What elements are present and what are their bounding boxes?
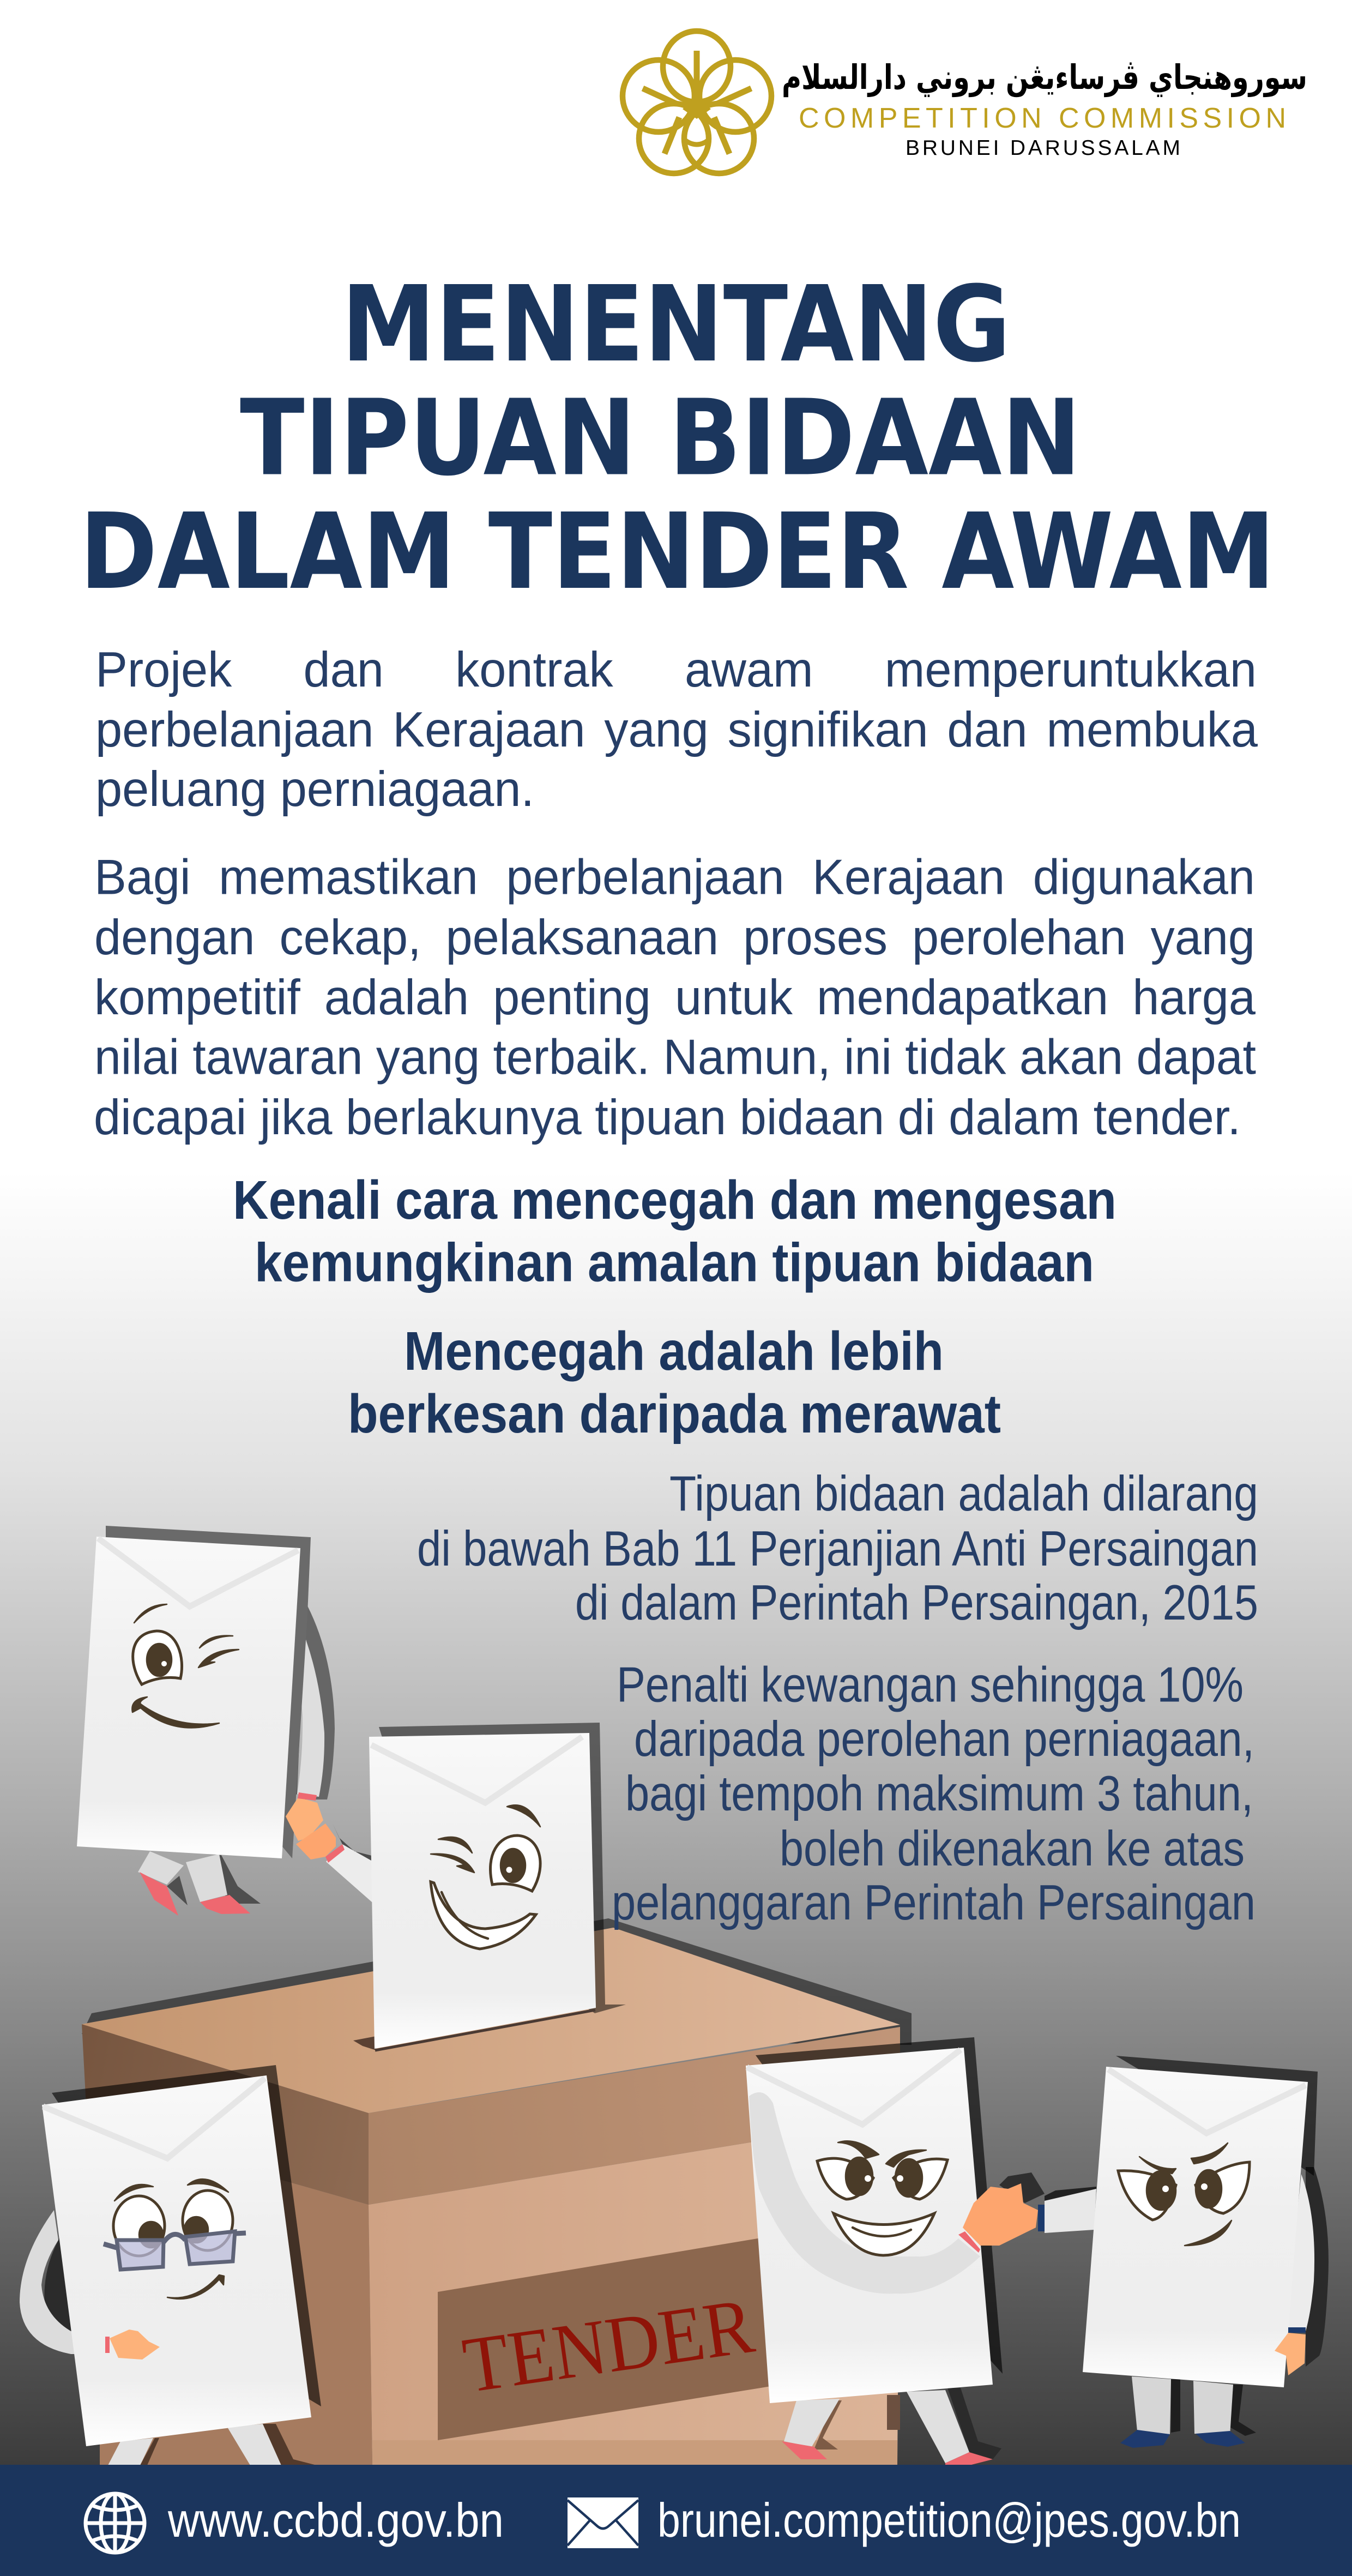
leg two [1193, 2381, 1233, 2436]
legal note: Tipuan bidaan adalah dilarang [669, 1466, 1258, 1521]
face [1118, 2143, 1250, 2246]
intro paragraph one: peluang perniagaan. [95, 762, 534, 817]
intro paragraph one: Projek dan kontrak awam memperuntukkan [95, 642, 1257, 697]
box slot [353, 2036, 376, 2050]
right leg shadow [1171, 2379, 1180, 2433]
logo emblem [623, 31, 771, 173]
heading: recognise [233, 1170, 1116, 1293]
logo: Competition Commission Brunei Darussalam [623, 31, 1307, 173]
leg shadow [947, 2388, 1001, 2459]
heading: prevention: Mencegah adalah lebih [404, 1321, 944, 1382]
envelope shadow [756, 2037, 1003, 2374]
leg shadow two [140, 2438, 159, 2465]
shoes [1120, 2430, 1170, 2448]
face [431, 1805, 540, 1949]
intro paragraph one: perbelanjaan Kerajaan yang signifikan dan membuka [95, 702, 1258, 757]
box front band [369, 2027, 900, 2205]
footer bar [0, 2465, 1352, 2576]
envelope shadow [106, 1526, 311, 1858]
cuff [325, 1844, 345, 1863]
intro paragraph one [95, 642, 1258, 817]
intro paragraph two: nilai tawaran yang terbaik. Namun, ini tidak akan dapat [94, 1030, 1256, 1085]
box right strip [887, 2395, 900, 2430]
flap [98, 1538, 298, 1606]
logo name line two: BRUNEI DARUSSALAM [906, 136, 1180, 160]
envelope shadow [52, 2065, 321, 2406]
high five shadow [999, 2172, 1045, 2203]
arm [294, 1618, 324, 1797]
face [104, 2179, 246, 2299]
face [132, 1604, 239, 1728]
right shoe [945, 2452, 993, 2465]
shoe right [200, 1895, 250, 1914]
envelope shadow [379, 1723, 626, 2013]
character: winking envelope top left [77, 1526, 335, 1916]
wrist band [1288, 2327, 1306, 2333]
flap [747, 2050, 961, 2124]
envelope shadow [1116, 2056, 1318, 2176]
face [817, 2141, 947, 2255]
leg shadow two [167, 1876, 188, 1905]
flap [371, 1737, 582, 1803]
ballot box [82, 1918, 912, 2465]
cuff [1038, 2205, 1045, 2231]
inner shadow [289, 1669, 301, 1799]
leg shadow on box [814, 2400, 842, 2449]
intro paragraph two [94, 850, 1256, 1145]
title: MENENTANG [341, 264, 1011, 386]
left shoe [782, 2441, 827, 2459]
hand [286, 1797, 323, 1841]
left leg [784, 2399, 840, 2447]
right arm [1288, 2174, 1314, 2331]
envelope body [369, 1733, 596, 2049]
cuff [298, 1792, 317, 1801]
legs [1132, 2376, 1171, 2434]
logo name line one: COMPETITION COMMISSION [799, 103, 1286, 134]
penalty note: bagi tempoh maksimum 3 tahun, [625, 1766, 1253, 1821]
shoe left [140, 1872, 178, 1916]
penalty note [612, 1658, 1256, 1930]
character: grinning envelope shaking hands [746, 2037, 1045, 2465]
hand [110, 2330, 160, 2360]
right leg [907, 2390, 969, 2463]
title [80, 264, 1275, 613]
penalty note: pelanggaran Perintah Persaingan [612, 1875, 1256, 1930]
intro paragraph two: kompetitif adalah penting untuk mendapatkan harga [94, 970, 1256, 1025]
legal note [417, 1466, 1258, 1630]
heading: recognise: kemungkinan amalan tipuan bidaan [255, 1232, 1094, 1293]
character: glasses envelope bottom left [20, 2065, 321, 2465]
icon: mail [568, 2497, 638, 2548]
tender text: TENDER [458, 2282, 759, 2410]
envelope body [1083, 2067, 1308, 2387]
box top [82, 1928, 900, 2113]
envelope body [77, 1537, 300, 1858]
arm [326, 1844, 376, 1906]
arm [1045, 2189, 1096, 2233]
penalty note: boleh dikenakan ke atas [780, 1821, 1245, 1876]
hand [296, 1823, 336, 1859]
arm shadow [44, 2236, 82, 2334]
arm shadow [305, 1606, 335, 1799]
penalty note: Penalti kewangan sehingga 10% [617, 1658, 1244, 1712]
arm shadow [333, 1823, 376, 1863]
right leg [227, 2424, 281, 2465]
hand [1275, 2333, 1306, 2375]
legs shadow [215, 1855, 261, 1904]
legal note: di bawah Bab 11 Perjanjian Anti Persaingan [417, 1521, 1258, 1576]
slot edge [375, 2010, 595, 2050]
flap [1108, 2069, 1306, 2133]
envelope body [42, 2075, 311, 2446]
hand [963, 2183, 1038, 2246]
character: smirking envelope right [1038, 2056, 1329, 2448]
envelope body [746, 2048, 993, 2403]
box front lower [369, 2118, 900, 2465]
cuff [958, 2231, 980, 2253]
icon: globe [86, 2494, 144, 2553]
email: brunei.competition@jpes.gov.bn [657, 2493, 1241, 2547]
arm [20, 2210, 109, 2354]
leg shadow [263, 2424, 317, 2465]
heading: recognise: Kenali cara mencegah dan mengesan [233, 1170, 1116, 1231]
title: TIPUAN BIDAAN [240, 377, 1081, 499]
flap [43, 2078, 265, 2158]
penalty note: daripada perolehan perniagaan, [634, 1712, 1254, 1767]
intro paragraph two: dengan cekap, pelaksanaan proses perolehan yang [94, 910, 1255, 965]
box left side lower [87, 2116, 372, 2465]
website: www.ccbd.gov.bn [167, 2493, 504, 2547]
heading: prevention: berkesan daripada merawat [348, 1383, 1001, 1445]
arm top shadow [1045, 2187, 1096, 2203]
right leg shadow two [1230, 2385, 1256, 2436]
heading: prevention [348, 1321, 1001, 1445]
left leg [108, 2438, 153, 2465]
glasses [104, 2231, 246, 2270]
legal note: di dalam Perintah Persaingan, 2015 [575, 1575, 1258, 1630]
intro paragraph two: Bagi memastikan perbelanjaan Kerajaan digunakan [94, 850, 1255, 905]
box base strip [372, 2440, 897, 2465]
intro paragraph two: dicapai jika berlakunya tipuan bidaan di dalam tender. [94, 1090, 1241, 1145]
character: smiling envelope in slot [296, 1723, 626, 2050]
tender label [438, 2236, 774, 2440]
box shadow [82, 1918, 912, 2045]
arm across body [749, 2092, 980, 2294]
leg two [186, 1854, 227, 1902]
cuff [105, 2337, 110, 2353]
right arm shadow [1306, 2167, 1329, 2367]
legs [138, 1851, 184, 1885]
box left side dark band [82, 2024, 369, 2205]
shoe two [1196, 2431, 1245, 2447]
